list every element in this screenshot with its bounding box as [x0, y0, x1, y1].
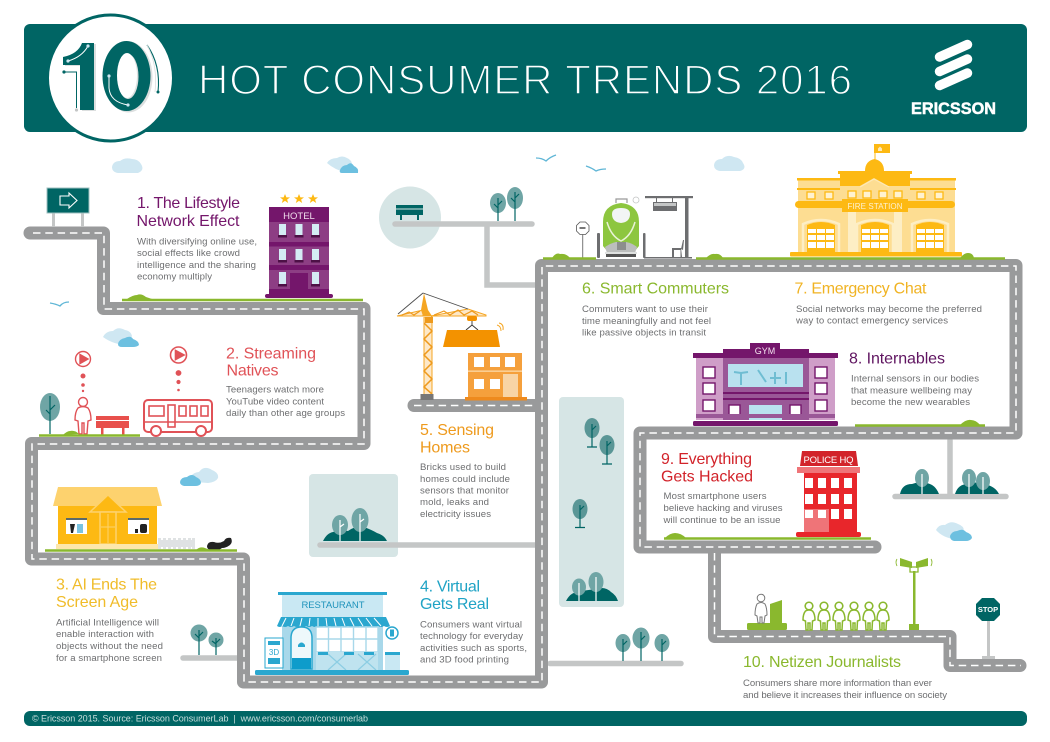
text block: [662, 491, 783, 526]
heading: 4. Virtual: [420, 579, 480, 596]
icon: crowd: [803, 602, 889, 630]
text block: that measure wellbeing may: [851, 385, 972, 396]
icon: top trees: [490, 187, 523, 221]
heading: [226, 346, 316, 380]
panel: 5 sensing homes: [397, 293, 527, 520]
icon: stop sign: STOP: [978, 605, 998, 614]
icon: speaker at podium: [747, 594, 787, 630]
text block: enable interaction with: [56, 629, 154, 640]
text block: Bricks used to build: [420, 462, 506, 473]
text block: intelligence and the sharing: [137, 260, 256, 271]
heading: [420, 579, 489, 613]
icon: loudspeaker pole: [896, 558, 932, 630]
icon: lower road trees: [616, 628, 670, 661]
text block: like passive objects in transit: [582, 328, 706, 338]
panel: 6 smart commuters: [543, 196, 1005, 338]
text block: [420, 620, 527, 666]
heading: [56, 576, 157, 611]
heading: 2. Streaming: [226, 346, 316, 363]
icon: park trees: [900, 469, 999, 494]
icon: restaurant: 3D: [269, 648, 279, 657]
text block: technology for everyday: [420, 631, 523, 642]
text block: Consumers share more information than ever: [743, 678, 933, 689]
secondary grey roads and park panels: [183, 186, 1006, 664]
heading: [136, 195, 240, 230]
icon: vertical panel trees: [566, 418, 618, 601]
text block: With diversifying online use,: [137, 236, 257, 248]
heading: [420, 422, 494, 456]
heading: Gets Real: [420, 596, 489, 613]
ground: [39, 431, 140, 436]
icon: house: [53, 487, 162, 549]
text block: mold, leaks and: [420, 497, 489, 508]
text block: Consumers want virtual: [420, 620, 522, 631]
icon: bus with play bubble: [144, 347, 212, 436]
panel: 4 virtual gets real: [255, 579, 527, 675]
icon: fire station: FIRE STATION: [848, 202, 903, 211]
icon: police HQ: POLICE HQ: [804, 455, 854, 466]
text block: [226, 385, 345, 419]
icon: person with play bubble: [75, 352, 91, 434]
icon: fence: [158, 538, 195, 549]
title: HOT CONSUMER TRENDS 2016: [198, 56, 852, 103]
icon: fire station: [790, 144, 962, 256]
text block: become the new wearables: [851, 397, 970, 408]
text block: social effects like crowd: [137, 248, 240, 259]
ground: [664, 533, 871, 538]
heading: Screen Age: [56, 594, 138, 611]
heading: 8. Internables: [849, 350, 945, 367]
heading: Gets Hacked: [661, 469, 753, 486]
text block: sensors that monitor: [420, 486, 510, 496]
text block: and 3D food printing: [420, 654, 509, 666]
main road: [30, 233, 1021, 682]
ground: [45, 547, 237, 550]
text block: time meaningfully and not feel: [582, 316, 711, 327]
header banner: [24, 15, 1027, 141]
icon: Ericsson logo: [911, 44, 996, 118]
ground: [122, 294, 363, 300]
heading: Homes: [420, 439, 470, 456]
icon: trees: [190, 624, 224, 655]
text block: [56, 618, 163, 664]
icon: train: [603, 197, 639, 257]
heading: 5. Sensing: [420, 422, 494, 439]
heading: 9. Everything: [661, 451, 752, 468]
heading: 3. AI Ends The: [56, 576, 157, 593]
footer: [24, 711, 1027, 726]
text block: Artificial Intelligence will: [56, 618, 159, 629]
icon: bench: [96, 416, 129, 435]
text block: [743, 678, 947, 701]
icon: Ericsson logo: ERICSSON: [911, 100, 996, 118]
heading: 6. Smart Commuters: [582, 280, 729, 297]
icon: restaurant: [255, 592, 409, 675]
panel: 7 emergency chat: [790, 144, 982, 326]
icon: dog: [207, 538, 232, 550]
text block: daily than other age groups: [226, 408, 345, 419]
ground: [855, 420, 985, 426]
panel: 1 lifestyle network effect: [122, 194, 363, 300]
icon: bench on park road: [396, 205, 423, 220]
text block: electricity issues: [420, 509, 491, 520]
text block: Teenagers watch more: [226, 385, 324, 396]
icon: gym: [693, 343, 838, 426]
icon: stop sign: [976, 598, 1000, 659]
heading: Natives: [226, 362, 278, 380]
icon: start sign: [47, 188, 89, 227]
icon: house under construction: [443, 323, 527, 400]
icon: stop sign: [576, 222, 589, 258]
text block: Most smartphone users: [664, 491, 767, 502]
text block: way to contact emergency services: [795, 316, 948, 326]
text block: [851, 374, 979, 408]
text block: homes could include: [420, 474, 510, 485]
text block: [420, 462, 510, 520]
panel: 8 internables: [693, 343, 999, 494]
text block: Commuters want to use their: [582, 304, 709, 315]
birds: [50, 155, 606, 306]
icon: restaurant: RESTAURANT: [302, 600, 365, 611]
heading: 7. Emergency Chat: [794, 280, 927, 297]
heading: Network Effect: [136, 213, 240, 230]
icon: park panel trees: [323, 508, 387, 541]
footer: © Ericsson 2015. Source: Ericsson ConsumerLab | www.ericsson.com/consumerlab: [32, 714, 368, 724]
icon: hotel: HOTEL: [283, 211, 315, 222]
text block: [137, 236, 257, 282]
panel: 10 netizen journalists: [743, 558, 1000, 701]
icon: tree: [40, 393, 60, 434]
text block: YouTube video content: [226, 396, 324, 407]
number 10 badge: [48, 15, 174, 141]
text block: objects without the need: [56, 641, 163, 652]
panel: 9 everything gets hacked: [661, 451, 871, 538]
clouds: [103, 156, 972, 541]
icon: police HQ: [796, 451, 861, 537]
icon: hotel: [265, 194, 333, 298]
icon: crane: [397, 293, 486, 400]
heading: 1. The Lifestyle: [137, 195, 240, 212]
ground: [543, 253, 1005, 258]
text block: [582, 304, 711, 338]
text block: Social networks may become the preferred: [796, 304, 982, 315]
text block: will continue to be an issue: [662, 515, 780, 526]
text block: economy multiply: [137, 272, 212, 282]
text block: Internal sensors in our bodies: [851, 374, 979, 385]
heading: [661, 451, 753, 486]
text block: for a smartphone screen: [56, 653, 162, 664]
text block: and believe it increases their influence on society: [743, 690, 947, 701]
panel: 2 streaming natives: [39, 346, 345, 436]
text block: activities such as sports,: [420, 643, 527, 654]
text block: believe hacking and viruses: [664, 503, 783, 514]
heading: 10. Netizen Journalists: [743, 654, 901, 671]
panel: 3 AI ends the screen age: [45, 487, 237, 664]
icon: gym: GYM: [755, 346, 775, 356]
text block: [795, 304, 982, 326]
icon: platform shelter: [597, 196, 693, 258]
